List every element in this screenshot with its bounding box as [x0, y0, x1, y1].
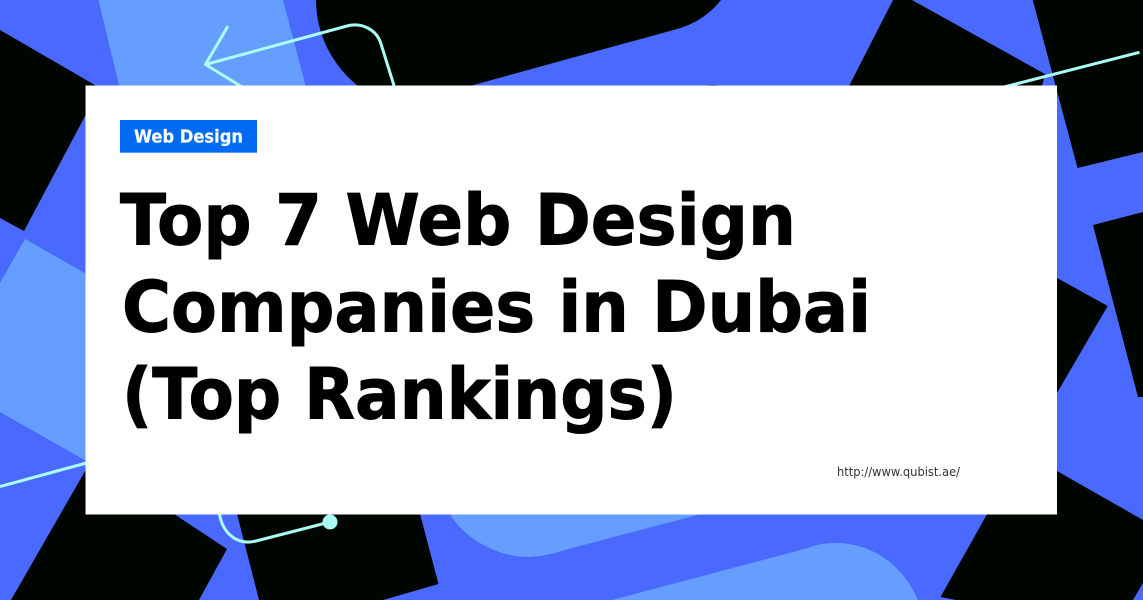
line: top right [1000, 52, 1140, 88]
arrow: bottom line with dot [219, 510, 338, 542]
source url: http://www.qubist.ae/ [837, 464, 961, 479]
category tag: Web Design [134, 127, 243, 147]
title: Top 7 Web Design [120, 180, 796, 262]
title [120, 180, 871, 435]
category tag [120, 120, 257, 153]
arrow: top line with arrowhead [206, 25, 396, 92]
line: left [0, 462, 90, 486]
title: Companies in Dubai [122, 267, 871, 349]
panel: white card [86, 86, 1057, 514]
title: (Top Rankings) [122, 353, 677, 435]
